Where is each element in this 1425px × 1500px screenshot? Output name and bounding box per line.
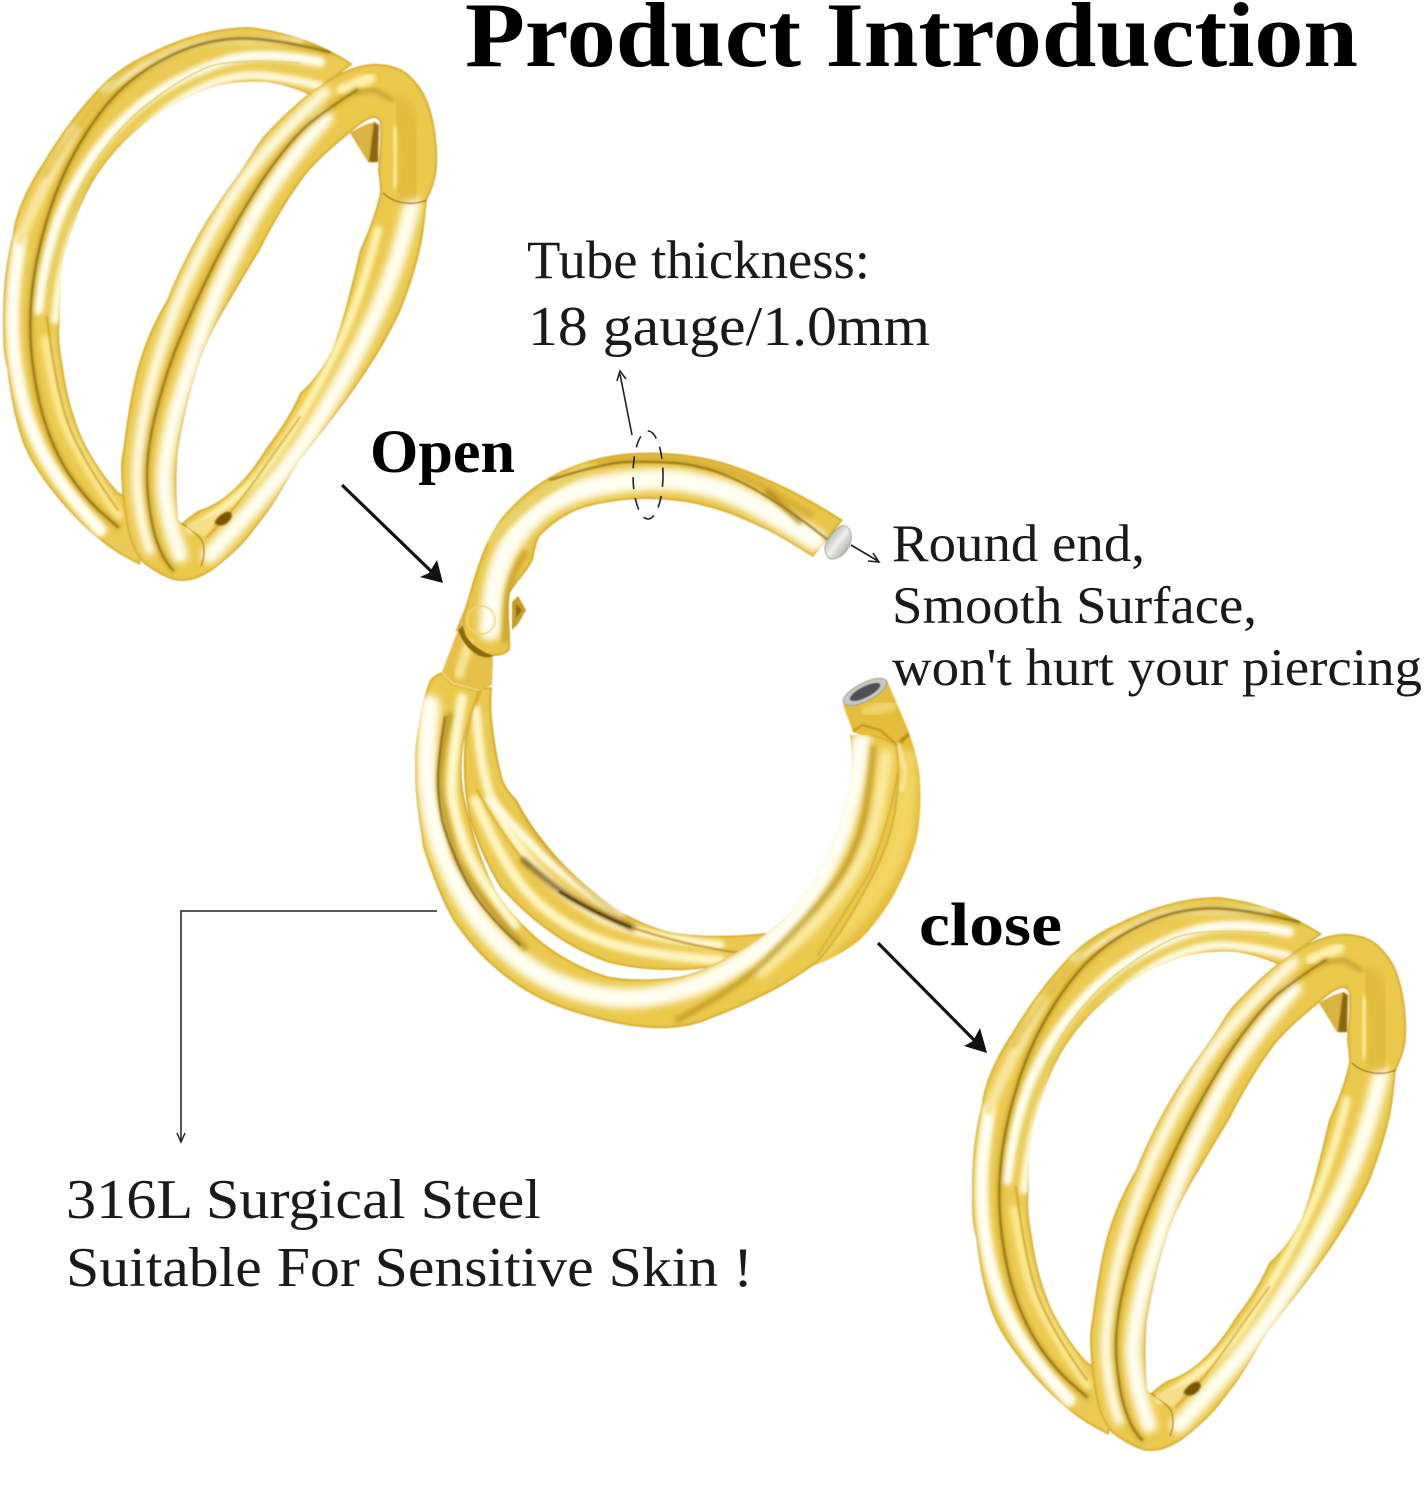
callout: material leader line bbox=[177, 911, 437, 1142]
label: Open: Open bbox=[370, 419, 515, 486]
text: material: 316L Surgical Steel bbox=[66, 1169, 541, 1231]
text: round end: won't hurt your piercing bbox=[892, 639, 1422, 697]
callout: tube thickness indicator bbox=[617, 371, 663, 519]
text: round end: Smooth Surface, bbox=[892, 577, 1257, 635]
arrow: close bbox=[878, 943, 987, 1053]
text: round end bbox=[892, 515, 1422, 697]
cavity end bbox=[840, 673, 890, 711]
upper arc bbox=[462, 453, 843, 656]
silver pin tip bbox=[825, 526, 851, 559]
text: tube thickness: Tube thickness: bbox=[527, 230, 870, 290]
label: close: close bbox=[919, 892, 1062, 959]
hinge bbox=[442, 596, 526, 690]
back crescent band bbox=[464, 687, 790, 970]
right back end of ring bbox=[800, 680, 921, 967]
icon: closed ring bottom-right bbox=[972, 897, 1406, 1451]
text: tube thickness bbox=[527, 230, 930, 358]
text: material bbox=[66, 1169, 753, 1299]
front band bbox=[415, 672, 899, 1028]
icon: closed ring top-left bbox=[3, 27, 437, 581]
text: material: Suitable For Sensitive Skin ! bbox=[66, 1237, 753, 1299]
icon: open ring centre bbox=[415, 453, 921, 1028]
callout: round end arrow bbox=[851, 545, 879, 562]
text: tube thickness: 18 gauge/1.0mm bbox=[528, 296, 930, 358]
arrow: open bbox=[342, 485, 443, 583]
text: round end: Round end, bbox=[892, 515, 1145, 573]
